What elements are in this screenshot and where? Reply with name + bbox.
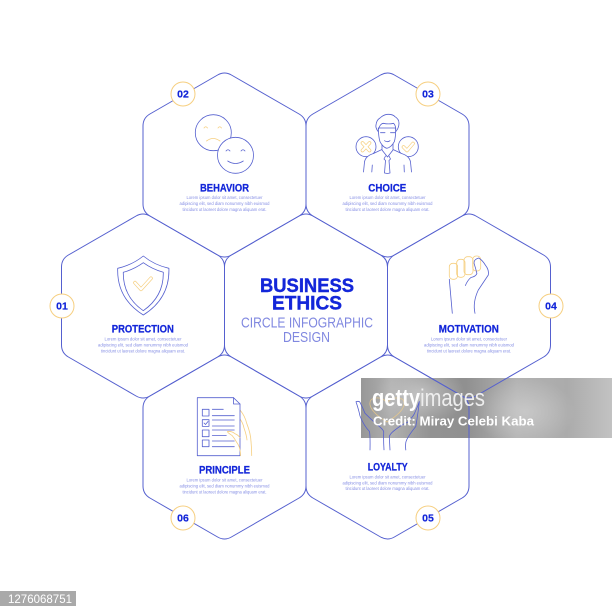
title [260, 276, 354, 314]
panel: loyalty [306, 355, 469, 539]
title: BUSINESS [260, 276, 354, 297]
hexagon outline [388, 214, 550, 398]
panel: choice [306, 73, 469, 257]
body text [180, 195, 270, 212]
number badge 04 [539, 294, 563, 318]
heading: MOTIVATION [439, 324, 499, 336]
number badge 06: 06 [177, 513, 189, 525]
body text: tincidunt ut laoreet dolore magna aliquam erat. [346, 486, 430, 491]
body text: tincidunt ut laoreet dolore magna aliquam erat. [182, 207, 266, 212]
heading: PRINCIPLE [199, 465, 250, 477]
panel: protection [50, 214, 224, 398]
watermark band [361, 378, 612, 438]
watermark text: gettyimages [372, 385, 485, 412]
number badge 03 [416, 82, 440, 106]
icon: man choosing between cross and check [356, 114, 418, 174]
hexagon outline [62, 214, 224, 398]
number badge 05 [416, 506, 440, 530]
heading: LOYALTY [368, 461, 408, 473]
body text: Lorem ipsum dolor sit amet, consectetuer [350, 474, 426, 480]
heading: PROTECTION [112, 324, 174, 336]
body text [98, 336, 189, 354]
body text: tincidunt ut laoreet dolore magna aliquam erat. [427, 348, 511, 354]
body text: adipiscing elit, sed diam nonummy nibh euismod [180, 484, 270, 488]
title: ETHICS [272, 294, 342, 314]
subtitle [241, 314, 373, 346]
image id tag: 1276068751 [8, 592, 72, 606]
number badge 03: 03 [422, 89, 434, 101]
number badge 04: 04 [545, 301, 557, 313]
icon: shield with check [118, 256, 169, 315]
body text: adipiscing elit, sed diam nonummy nibh euismod [342, 201, 433, 206]
body text: adipiscing elit, sed diam nonummy nibh euismod [180, 201, 270, 206]
body text: Lorem ipsum dolor sit amet, consectetuer [186, 478, 263, 482]
heading: CHOICE [368, 182, 406, 194]
panel: motivation [388, 214, 563, 398]
body text: Lorem ipsum dolor sit amet, consectetuer [350, 195, 426, 200]
body text: Lorem ipsum dolor sit amet, consectetuer [104, 336, 182, 342]
body text: Lorem ipsum dolor sit amet, consectetuer [431, 336, 508, 342]
heading: BEHAVIOR [200, 182, 249, 194]
panel: principle [143, 355, 306, 539]
hexagon outline [143, 73, 306, 257]
body text: adipiscing elit, sed diam nonummy nibh euismod [342, 480, 433, 485]
icon: checklist held by hand [197, 398, 252, 456]
panel: behavior [143, 73, 306, 257]
panel: center title [224, 214, 388, 398]
body text [342, 474, 433, 491]
number badge 02: 02 [177, 89, 189, 101]
number badge 01 [50, 294, 74, 318]
body text: tincidunt ut laoreet dolore magna aliquam erat. [182, 490, 266, 494]
watermark text [372, 385, 535, 428]
icon: open hands with heart [356, 398, 419, 450]
body text [180, 478, 270, 494]
number badge 05: 05 [422, 513, 434, 525]
body text: Lorem ipsum dolor sit amet, consectetuer [186, 195, 263, 200]
body text: tincidunt ut laoreet dolore magna aliquam erat. [101, 348, 185, 354]
body text: adipiscing elit, sed diam nonummy nibh euismod [98, 342, 189, 348]
number badge 01: 01 [56, 301, 68, 313]
body text [342, 195, 433, 212]
number badge 02 [171, 82, 195, 106]
body text: tincidunt ut laoreet dolore magna aliquam erat. [346, 207, 430, 212]
number badge 06 [171, 506, 195, 530]
icon: sad and happy faces [195, 115, 254, 173]
hexagon outline [306, 355, 469, 539]
watermark text: Credit: Miray Celebi Kaba [373, 414, 535, 428]
subtitle: CIRCLE INFOGRAPHIC [241, 314, 373, 332]
hexagon outline [143, 355, 306, 539]
body text [424, 336, 515, 354]
icon: raised fist [449, 256, 488, 313]
center hexagon [224, 214, 388, 398]
hexagon outline [306, 73, 469, 257]
subtitle: DESIGN [283, 329, 330, 346]
body text: adipiscing elit, sed diam nonummy nibh euismod [424, 342, 515, 348]
